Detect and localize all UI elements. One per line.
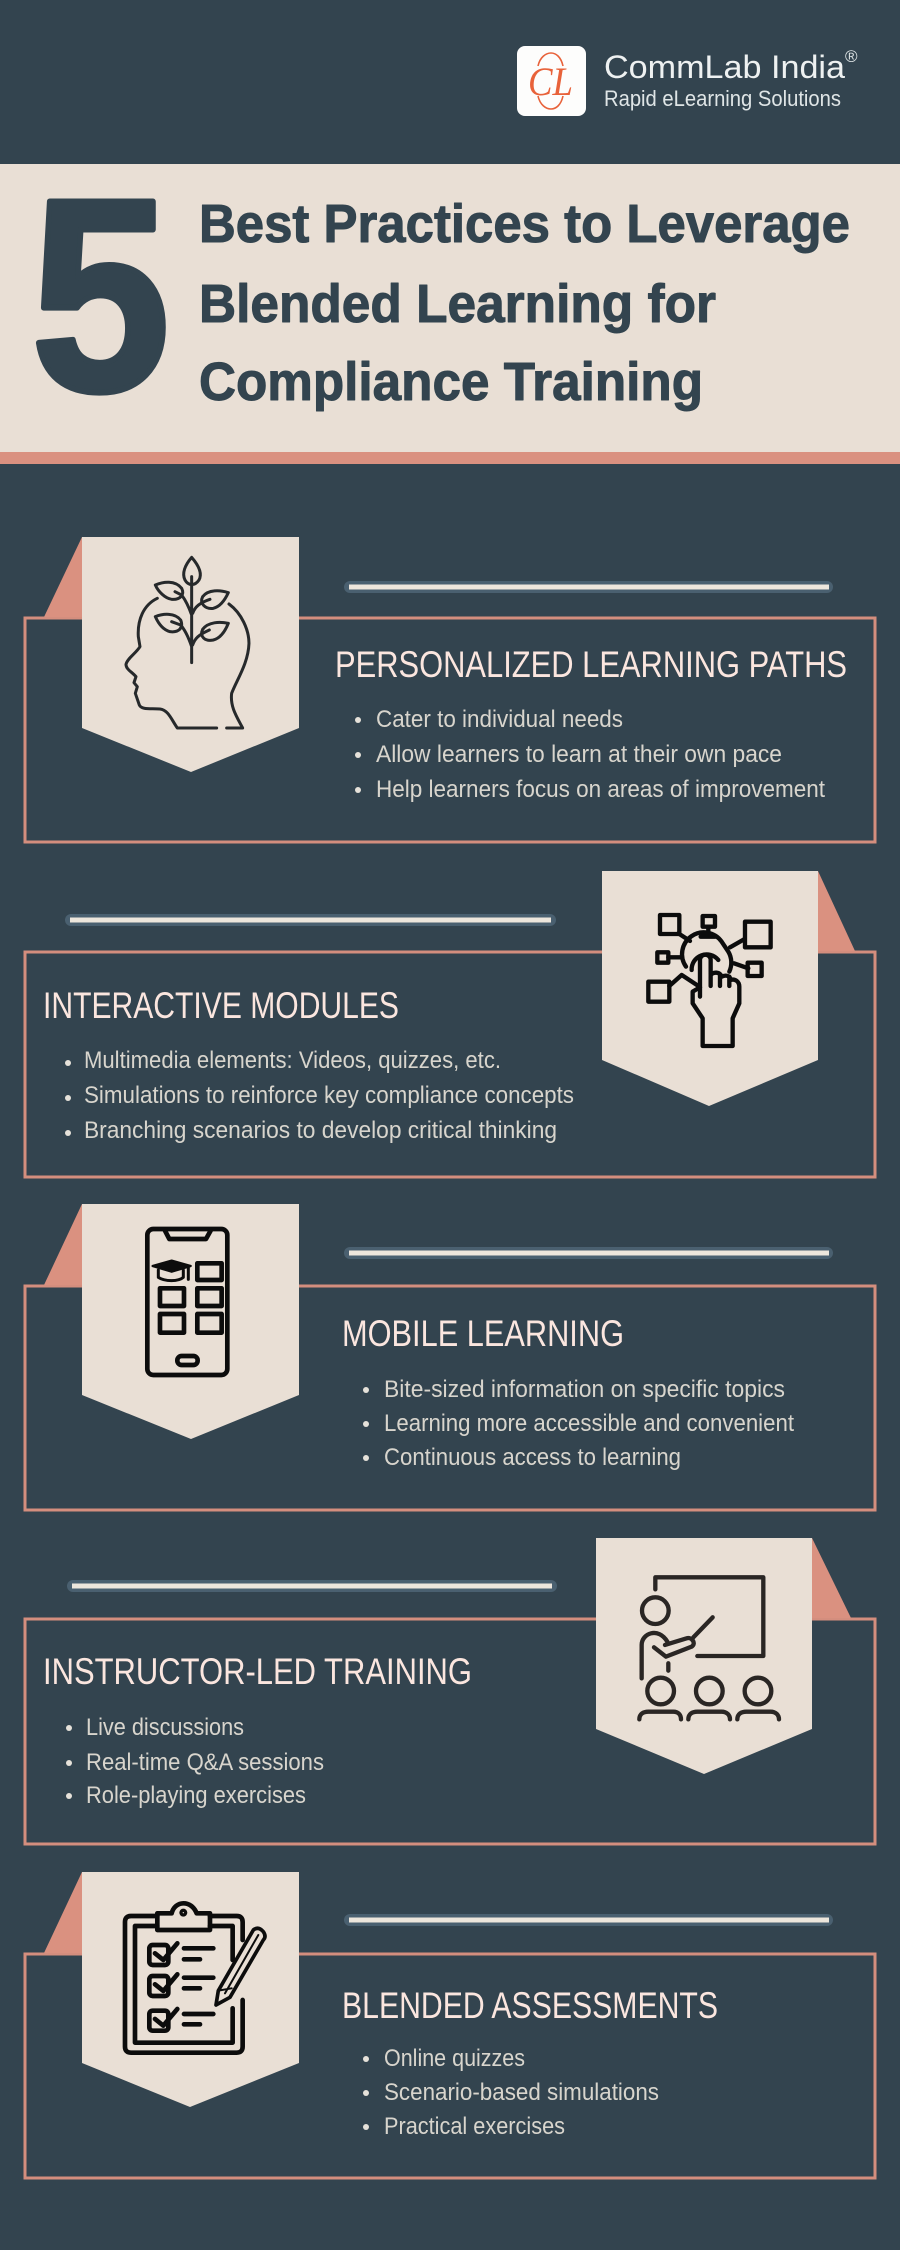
- logo: CommLab India: [517, 46, 858, 116]
- main heading: Blended Learning for: [199, 274, 716, 334]
- bullet list: [66, 1714, 324, 1809]
- bullet list: Help learners focus on areas of improvement: [376, 776, 825, 803]
- icon: clipboard checklist with pencil: [125, 1903, 265, 2053]
- bullet list: Online quizzes: [384, 2045, 525, 2072]
- panel: personalized learning paths: [25, 537, 875, 842]
- main heading: [199, 194, 850, 412]
- bullet list: Branching scenarios to develop critical thinking: [84, 1117, 557, 1144]
- bullet list: Allow learners to learn at their own pace: [376, 741, 782, 768]
- bullet list: Cater to individual needs: [376, 706, 623, 733]
- bullet list: Bite-sized information on specific topics: [384, 1376, 785, 1403]
- big number 5: 5: [31, 143, 170, 449]
- main heading: Best Practices to Leverage: [199, 194, 850, 254]
- icon: hand touching network: [648, 915, 771, 1046]
- bullet list: Practical exercises: [384, 2113, 565, 2140]
- bullet list: Continuous access to learning: [384, 1444, 681, 1471]
- bullet list: [363, 2045, 659, 2140]
- logo badge: CL: [528, 59, 573, 104]
- registered mark: ®: [845, 47, 858, 66]
- panel: mobile learning: [25, 1204, 875, 1510]
- panel: instructor-led training: [25, 1538, 875, 1844]
- bullet list: Simulations to reinforce key compliance concepts: [84, 1082, 574, 1109]
- bullet list: Scenario-based simulations: [384, 2079, 659, 2106]
- title band: [0, 143, 900, 464]
- bullet list: [65, 1047, 574, 1144]
- panel: blended assessments: [25, 1872, 875, 2178]
- logo badge: [517, 46, 586, 116]
- heading: BLENDED ASSESSMENTS: [342, 1985, 718, 2026]
- icon: head with plant: [126, 557, 249, 728]
- bullet list: Live discussions: [86, 1714, 244, 1741]
- bullet list: Learning more accessible and convenient: [384, 1410, 794, 1437]
- bullet list: Role-playing exercises: [86, 1782, 306, 1809]
- heading: INTERACTIVE MODULES: [43, 985, 399, 1026]
- brand name: CommLab India: [604, 49, 845, 85]
- bullet list: [363, 1376, 794, 1471]
- icon: smartphone with graduation cap: [147, 1229, 227, 1375]
- bullet list: Real-time Q&A sessions: [86, 1749, 324, 1776]
- bullet list: [355, 706, 825, 803]
- heading: MOBILE LEARNING: [342, 1313, 624, 1354]
- main heading: Compliance Training: [199, 352, 703, 412]
- bullet list: Multimedia elements: Videos, quizzes, etc.: [84, 1047, 501, 1074]
- panel: interactive modules: [25, 871, 875, 1177]
- heading: INSTRUCTOR-LED TRAINING: [43, 1651, 472, 1692]
- tagline: Rapid eLearning Solutions: [604, 86, 841, 111]
- icon: instructor with audience: [639, 1577, 779, 1719]
